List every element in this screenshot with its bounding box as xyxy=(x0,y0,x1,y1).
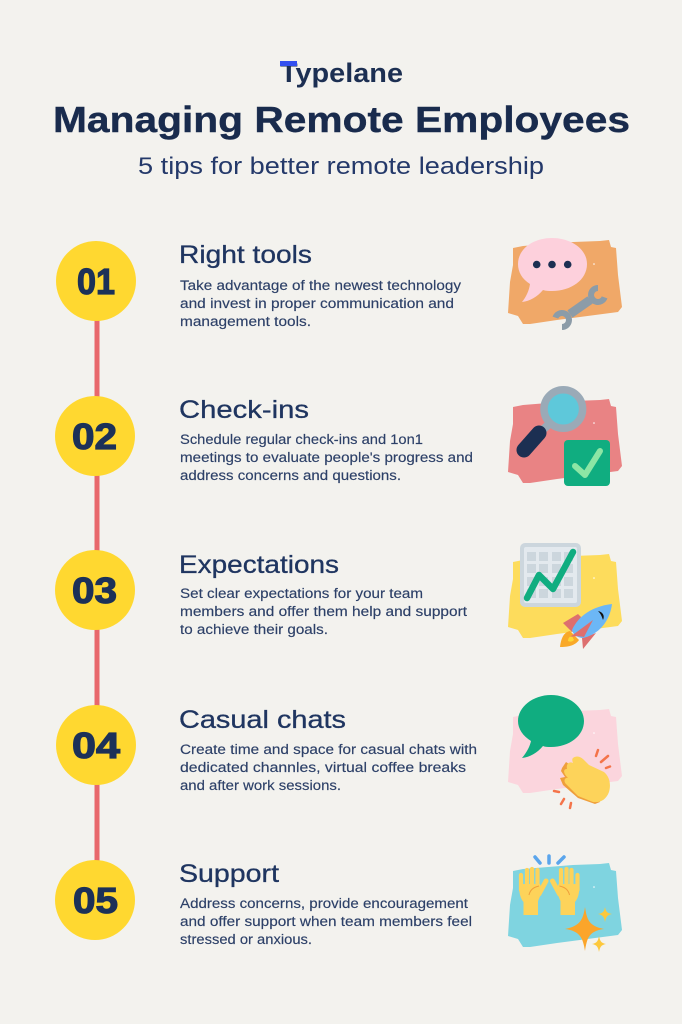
title: Managing Remote Employees xyxy=(53,99,630,140)
timeline connector xyxy=(94,315,100,865)
logo: Typelane: Typelane xyxy=(280,58,403,88)
description 02: Schedule regular check-ins and 1on1 xyxy=(180,432,423,447)
tip 05 xyxy=(55,856,622,952)
description 04: and after work sessions. xyxy=(180,778,341,793)
icon: growth chart and rocket xyxy=(508,543,622,649)
description 03 xyxy=(180,586,467,637)
number badge 02: 02 xyxy=(72,416,117,457)
number badge 01: 01 xyxy=(77,261,115,302)
description 02 xyxy=(180,432,473,483)
subtitle: 5 tips for better remote leadership xyxy=(138,153,544,180)
icon: green speech bubble and clapping hands xyxy=(508,695,622,808)
number badge 04 xyxy=(56,705,136,785)
heading: Casual chats: Casual chats xyxy=(179,706,346,734)
description 01: and invest in proper communication and xyxy=(180,296,454,311)
description 05: Address concerns, provide encouragement xyxy=(180,896,468,911)
description 05: and offer support when team members feel xyxy=(180,914,472,929)
description 03: members and offer them help and support xyxy=(180,604,467,619)
heading: Expectations: Expectations xyxy=(179,551,339,579)
description 04: Create time and space for casual chats with xyxy=(180,742,477,757)
tip 03 xyxy=(55,543,622,649)
number badge 03 xyxy=(55,550,135,630)
number badge 03: 03 xyxy=(72,570,117,611)
heading: Right tools: Right tools xyxy=(179,241,312,269)
heading: Support: Support xyxy=(179,860,279,888)
description 05: stressed or anxious. xyxy=(180,932,312,947)
description 04 xyxy=(180,742,477,793)
icon: speech bubble and wrench xyxy=(508,238,622,327)
description 01: management tools. xyxy=(180,314,311,329)
number badge 01 xyxy=(56,241,136,321)
description 01: Take advantage of the newest technology xyxy=(180,278,461,293)
tip 01 xyxy=(56,238,622,329)
description 01 xyxy=(180,278,461,329)
description 02: meetings to evaluate people's progress and xyxy=(180,450,473,465)
number badge 05 xyxy=(55,860,135,940)
number badge 02 xyxy=(55,396,135,476)
description 05 xyxy=(180,896,472,947)
tip 04 xyxy=(56,695,622,808)
description 03: Set clear expectations for your team xyxy=(180,586,423,601)
icon: magnifier and check box xyxy=(508,390,622,486)
icon: raised hands and sparkles xyxy=(508,856,622,952)
number badge 05: 05 xyxy=(73,880,118,921)
description 03: to achieve their goals. xyxy=(180,622,328,637)
heading: Check-ins: Check-ins xyxy=(179,396,309,424)
description 04: dedicated channles, virtual coffee breaks xyxy=(180,760,466,775)
tip 02 xyxy=(55,390,622,486)
description 02: address concerns and questions. xyxy=(180,468,401,483)
number badge 04: 04 xyxy=(72,725,120,766)
